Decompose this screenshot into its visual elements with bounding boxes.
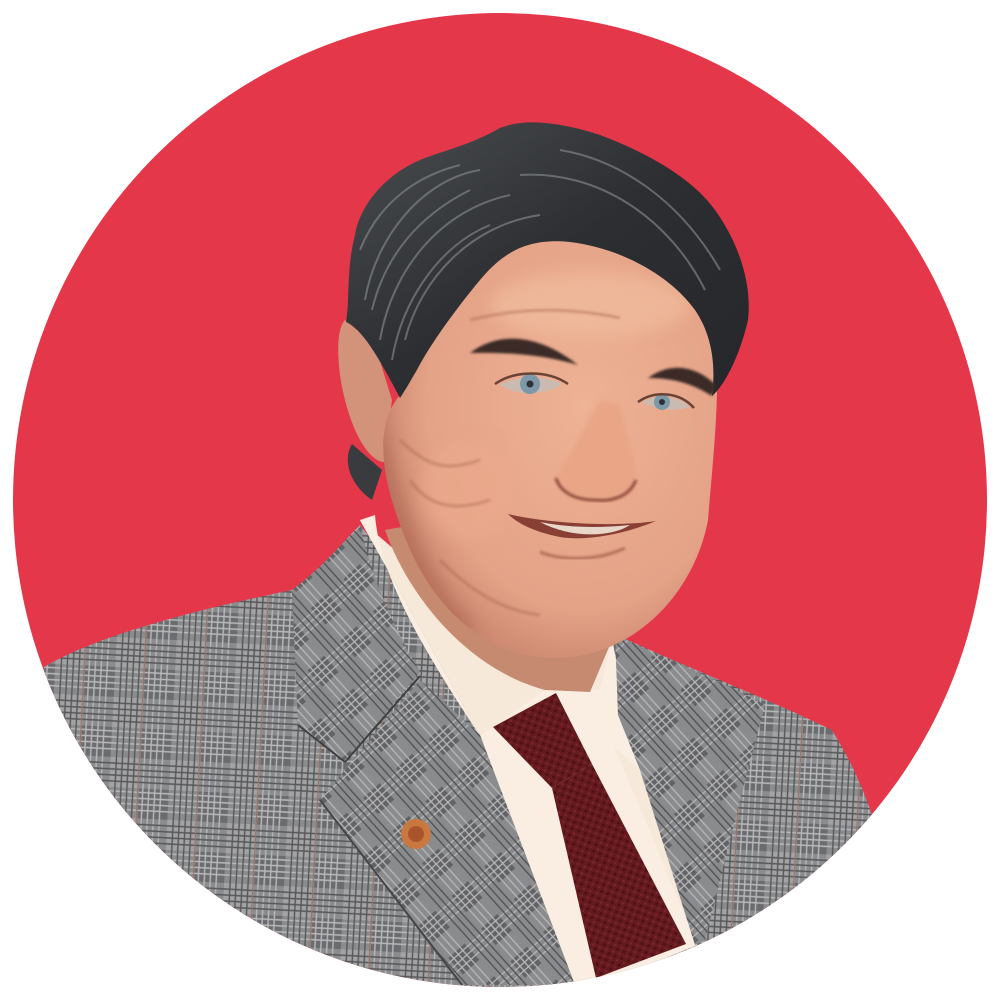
face: [383, 225, 717, 658]
ear: [338, 320, 392, 462]
jacket body: [44, 525, 872, 1000]
face shading: [360, 273, 690, 640]
left lapel: [292, 525, 575, 985]
right eye: [638, 394, 694, 410]
hair highlights: [360, 150, 720, 360]
lower hair at neck: [348, 444, 382, 500]
lapel pin: [401, 819, 431, 849]
mouth: [508, 514, 656, 558]
right eyebrow: [648, 368, 716, 396]
right lapel: [615, 634, 765, 945]
person: [44, 122, 872, 1000]
necktie: [493, 693, 686, 978]
nose: [555, 400, 636, 500]
hair: [346, 122, 749, 398]
left eyebrow: [470, 339, 578, 365]
left eye: [495, 374, 568, 394]
neck: [385, 520, 612, 692]
shirt: [360, 515, 697, 985]
